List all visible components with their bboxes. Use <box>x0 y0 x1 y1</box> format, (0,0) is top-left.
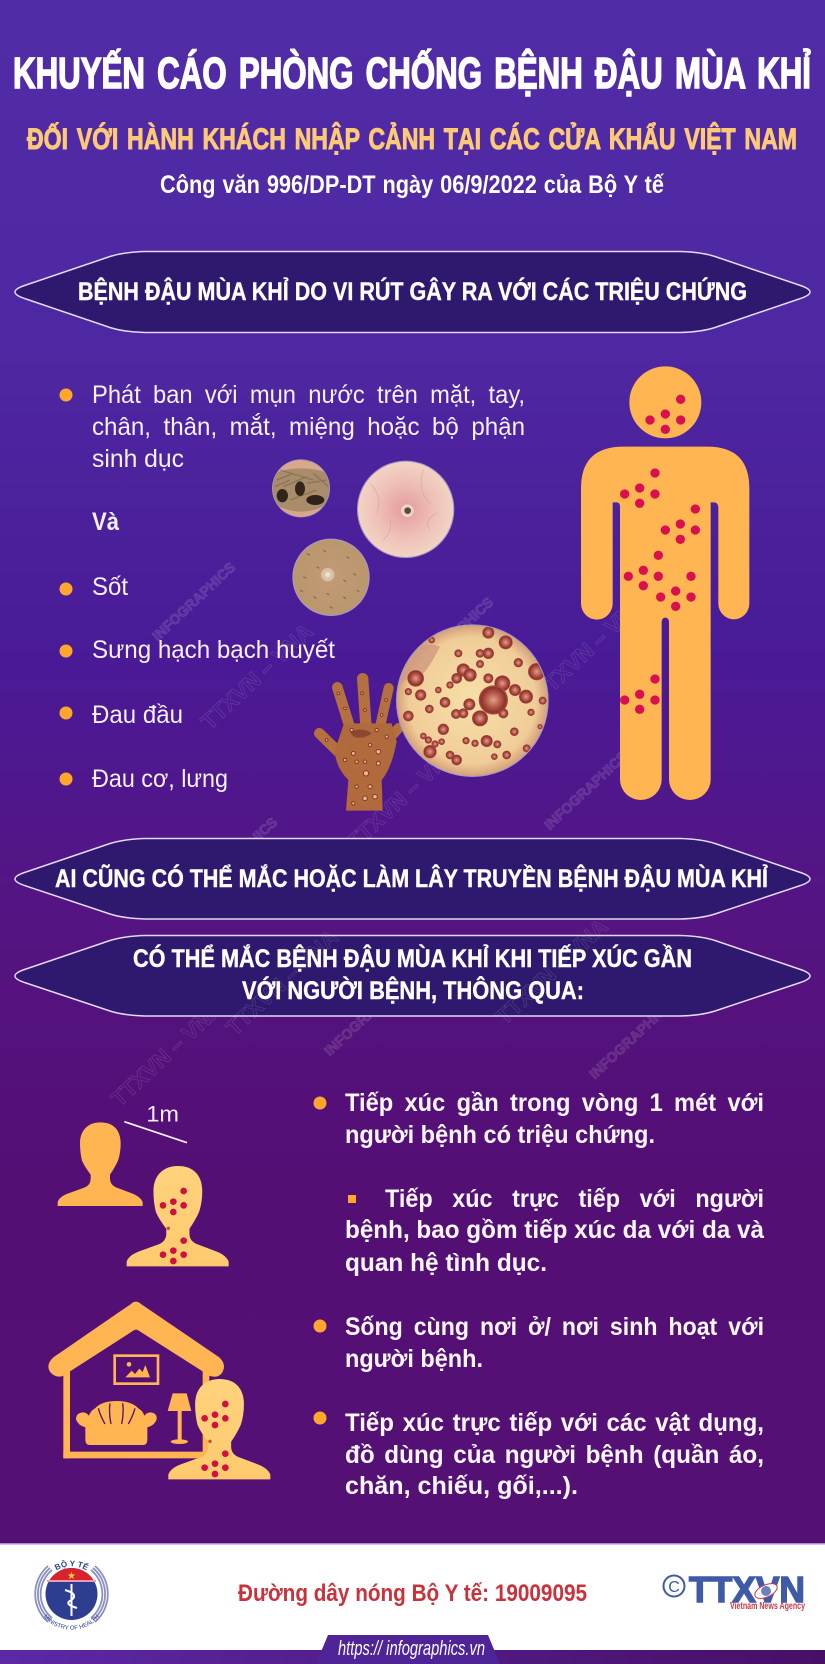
house <box>48 1302 224 1458</box>
healthy person <box>58 1122 143 1206</box>
symptoms list: Đau cơ, lưng <box>92 765 228 793</box>
url: https:// infographics.vn <box>338 1638 485 1660</box>
infected person <box>127 1166 229 1266</box>
bottom bar <box>0 1650 825 1664</box>
watermarks: INFOGRAPHICS <box>541 748 630 833</box>
symptoms list: Đau đầu <box>92 701 183 729</box>
sofa <box>76 1401 157 1445</box>
item: close contact <box>314 1089 764 1149</box>
banner: transmission heading <box>15 936 810 1016</box>
text: rash: Phát ban với mụn nước trên mặt, tay, <box>92 381 525 409</box>
item: close contact: Tiếp xúc gần trong vòng 1 mét với <box>345 1089 764 1117</box>
item: living together <box>314 1313 764 1373</box>
logo: ttxvn: TTXVN <box>689 1569 805 1610</box>
distance line <box>124 1122 187 1143</box>
icon: house with infected person <box>48 1302 270 1479</box>
symptoms list: chân, thân, mắt, miệng hoặc bộ phận <box>92 412 525 441</box>
icon: two people 1m apart <box>58 1102 229 1266</box>
watermarks over banners <box>221 914 613 1040</box>
picture frame <box>115 1356 158 1384</box>
item: direct contact: quan hệ tình dục. <box>345 1249 547 1277</box>
skin photos and hand <box>270 457 549 811</box>
banner: anyone can catch it <box>15 838 810 919</box>
logo: ttxvn: C <box>668 1579 680 1596</box>
item: belongings <box>314 1409 764 1500</box>
head <box>629 366 701 438</box>
symptoms list: Sưng hạch bạch huyết <box>92 636 335 664</box>
banner: transmission heading: VỚI NGƯỜI BỆNH, THÔNG QUA: <box>242 975 584 1005</box>
item: direct contact: bệnh, bao gồm tiếp xúc da với da và <box>345 1216 764 1244</box>
body figure with rash <box>581 366 749 800</box>
banner: transmission heading: CÓ THỂ MẮC BỆNH ĐẬU MÙA KHỈ KHI TIẾP XÚC GẦN <box>133 943 692 973</box>
banner: symptoms heading <box>15 252 810 332</box>
item: direct contact: Tiếp xúc trực tiếp với người <box>385 1185 764 1213</box>
rash dots <box>620 395 700 714</box>
label 1m: 1m <box>146 1102 179 1127</box>
watermarks: INFOGRAPHICS <box>191 814 280 899</box>
logo: ministry of health: MINISTRY OF HEALTH <box>44 1614 100 1630</box>
document reference: Công văn 996/DP-DT ngày 06/9/2022 của Bộ Y tế <box>160 171 664 199</box>
item: direct contact <box>345 1185 764 1277</box>
symptoms list <box>60 381 525 793</box>
photo: pustules close-up <box>396 624 549 777</box>
url tab <box>316 1635 500 1664</box>
item: belongings: đồ dùng của người bệnh (quần áo, <box>345 1441 764 1469</box>
watermarks: INFOGRAPHICS <box>407 594 496 679</box>
item: living together: người bệnh. <box>345 1345 483 1373</box>
watermarks: TTXVN – VNA <box>529 590 651 705</box>
watermarks: INFOGRAPHICS <box>321 974 410 1059</box>
watermarks <box>106 559 675 1111</box>
transmission list <box>314 1089 764 1500</box>
item: close contact: người bệnh có triệu chứng. <box>345 1121 655 1149</box>
watermarks over banners: TTXVN – VNA <box>491 914 613 1029</box>
watermarks: TTXVN – VNA <box>196 619 318 734</box>
photo: tan lesion <box>292 539 370 616</box>
infected person <box>168 1379 270 1479</box>
item: belongings: chăn, chiếu, gối,...). <box>345 1472 578 1500</box>
item: living together: Sống cùng nơi ở/ nơi sinh hoạt với <box>345 1313 764 1341</box>
photo: scabs <box>272 459 330 518</box>
watermarks: TTXVN – VNA <box>106 996 228 1111</box>
body <box>581 447 749 800</box>
logo: ministry of health: BỘ Y TẾ <box>54 1560 90 1570</box>
watermarks: INFOGRAPHICS <box>149 559 238 644</box>
item: belongings: Tiếp xúc trực tiếp với các vật dụng, <box>345 1409 764 1437</box>
photo: pink lesion <box>357 461 454 558</box>
logo: ministry of health <box>34 1560 109 1630</box>
lamp <box>168 1393 191 1444</box>
symptoms list: Sốt <box>92 573 128 601</box>
footer <box>0 1543 825 1664</box>
watermarks: TTXVN – VNA <box>342 739 464 854</box>
symptoms list: sinh dục <box>92 445 184 473</box>
watermarks over banners: TTXVN – VNA <box>221 925 343 1040</box>
watermarks: INFOGRAPHICS <box>586 997 675 1082</box>
hotline: Đường dây nóng Bộ Y tế: 19009095 <box>238 1580 587 1607</box>
symptoms list: Và <box>92 508 119 536</box>
bullet: rash <box>60 388 72 402</box>
logo: ministry of health: ★ <box>67 1571 76 1582</box>
hand illustration <box>319 679 399 811</box>
